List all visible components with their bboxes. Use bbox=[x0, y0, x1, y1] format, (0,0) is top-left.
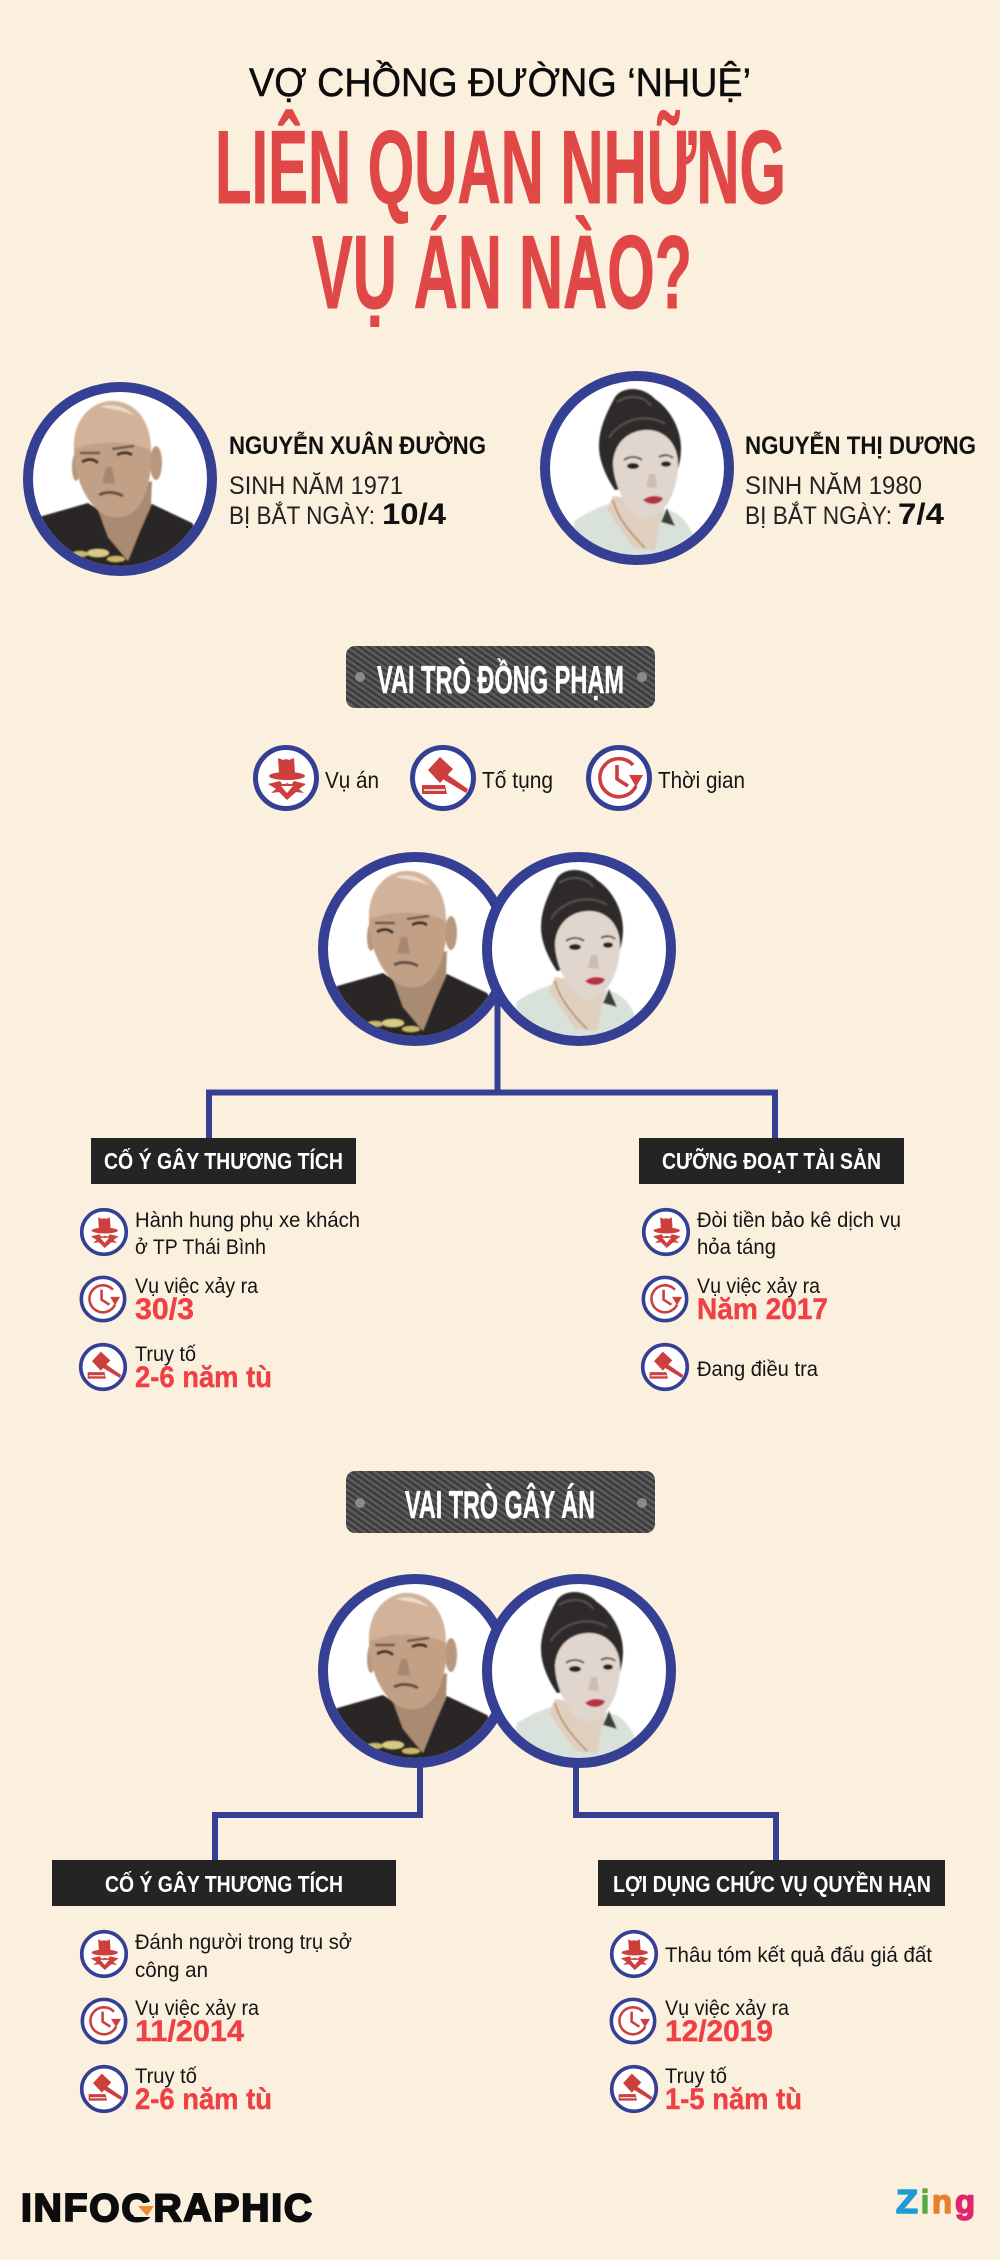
time value: 30/3 bbox=[135, 1293, 194, 1326]
icon: gavel bbox=[81, 1345, 125, 1389]
arrest date: 10/4 bbox=[382, 498, 446, 531]
portrait: woman bbox=[545, 376, 729, 563]
title bbox=[215, 59, 786, 331]
time label: Vụ việc xảy ra bbox=[135, 1997, 259, 2020]
profile: Nguyễn Xuân Đường bbox=[25, 387, 486, 574]
case description: Đòi tiền bảo kê dịch vụ bbox=[697, 1209, 901, 1232]
case heading: Cố ý gây thương tích: CỐ Ý GÂY THƯƠNG TÍCH bbox=[105, 1870, 343, 1897]
icon: gavel bbox=[612, 2067, 656, 2111]
legend bbox=[256, 748, 745, 808]
case description: Hành hung phụ xe khách bbox=[135, 1209, 360, 1232]
case description line 2: hỏa táng bbox=[697, 1236, 776, 1259]
case heading: Lợi dụng chức vụ quyền hạn bbox=[598, 1860, 945, 1906]
case details: right column bbox=[611, 1932, 932, 2116]
case description: Thâu tóm kết quả đấu giá đất bbox=[665, 1944, 932, 1967]
case details: left column bbox=[82, 1931, 352, 2116]
footer logo: Infographic: INFOGRAPHIC bbox=[21, 2187, 312, 2230]
arrest label: BỊ BẮT NGÀY: bbox=[229, 500, 375, 530]
case heading: Cố ý gây thương tích bbox=[91, 1138, 356, 1184]
arrest date: 7/4 bbox=[898, 498, 944, 531]
time label: Vụ việc xảy ra bbox=[697, 1275, 820, 1298]
icon: spy bbox=[644, 1210, 688, 1254]
sentence value: 2-6 năm tù bbox=[135, 2083, 272, 2116]
sentence value: 2-6 năm tù bbox=[135, 1361, 272, 1394]
case heading: Cưỡng đoạt tài sản: CƯỠNG ĐOẠT TÀI SẢN bbox=[662, 1146, 881, 1174]
icon: gavel bbox=[412, 748, 474, 808]
connector: section 1 bbox=[209, 990, 775, 1138]
icon: spy bbox=[82, 1932, 126, 1976]
portrait: man bbox=[25, 387, 215, 574]
section banner: Vai trò đồng phạm bbox=[346, 646, 655, 708]
legend label: Tố tụng bbox=[482, 767, 553, 793]
icon: spy bbox=[82, 1210, 126, 1254]
section banner: Vai trò gây án bbox=[346, 1471, 655, 1533]
connector: section 2 left bbox=[215, 1760, 420, 1860]
birth year: SINH NĂM 1971 bbox=[229, 471, 403, 500]
icon: gavel bbox=[643, 1345, 687, 1389]
prosecution label: Truy tố bbox=[135, 1343, 196, 1366]
case heading: Lợi dụng chức vụ quyền hạn: LỢI DỤNG CHỨC VỤ QUYỀN HẠN bbox=[613, 1870, 931, 1897]
icon: clock bbox=[588, 748, 650, 808]
sentence value: 1-5 năm tù bbox=[665, 2083, 802, 2116]
case description line 2: ở TP Thái Bình bbox=[135, 1236, 266, 1259]
icon: spy bbox=[612, 1932, 656, 1976]
couple portraits: section 1 bbox=[320, 857, 671, 1044]
status: Đang điều tra bbox=[697, 1358, 818, 1381]
time value: 11/2014 bbox=[135, 2015, 244, 2048]
connector: section 2 right bbox=[576, 1760, 776, 1860]
footer logo: Zing: n bbox=[932, 2183, 952, 2220]
footer logo: Zing: i bbox=[921, 2183, 929, 2220]
legend label: Vụ án bbox=[325, 767, 379, 793]
case details: right column bbox=[643, 1209, 901, 1389]
footer logo: Zing bbox=[896, 2183, 975, 2220]
case heading: Cố ý gây thương tích: CỐ Ý GÂY THƯƠNG TÍCH bbox=[104, 1147, 343, 1174]
time value: Năm 2017 bbox=[697, 1293, 828, 1326]
icon: spy bbox=[256, 748, 316, 808]
icon: clock bbox=[611, 1999, 655, 2043]
case details: left column bbox=[81, 1209, 360, 1394]
name: NGUYỄN THỊ DƯƠNG bbox=[745, 430, 976, 460]
section banner: Vai trò gây án: VAI TRÒ GÂY ÁN bbox=[405, 1483, 595, 1527]
name: NGUYỄN XUÂN ĐƯỜNG bbox=[229, 430, 486, 460]
time label: Vụ việc xảy ra bbox=[665, 1997, 789, 2020]
time label: Vụ việc xảy ra bbox=[135, 1275, 258, 1298]
title line 3: VỤ ÁN NÀO? bbox=[312, 215, 692, 331]
prosecution label: Truy tố bbox=[135, 2065, 197, 2088]
icon: clock bbox=[643, 1277, 687, 1321]
time value: 12/2019 bbox=[665, 2015, 773, 2048]
title line 1: VỢ CHỒNG ĐƯỜNG ‘NHUỆ’ bbox=[249, 59, 751, 105]
couple portraits: section 2 bbox=[320, 1579, 671, 1766]
case description line 2: công an bbox=[135, 1959, 208, 1982]
section banner: Vai trò đồng phạm: VAI TRÒ ĐỒNG PHẠM bbox=[377, 658, 624, 702]
profile: Nguyễn Thị Dương bbox=[545, 376, 976, 563]
footer logo: Zing: Z bbox=[896, 2183, 918, 2220]
birth year: SINH NĂM 1980 bbox=[745, 471, 922, 500]
prosecution label: Truy tố bbox=[665, 2065, 727, 2088]
icon: clock bbox=[82, 1999, 126, 2043]
arrest label: BỊ BẮT NGÀY: bbox=[745, 500, 892, 530]
icon: gavel bbox=[82, 2067, 126, 2111]
legend label: Thời gian bbox=[658, 767, 745, 793]
case heading: Cưỡng đoạt tài sản bbox=[639, 1138, 904, 1184]
icon: clock bbox=[81, 1277, 125, 1321]
case description: Đánh người trong trụ sở bbox=[135, 1931, 352, 1954]
case heading: Cố ý gây thương tích bbox=[52, 1860, 396, 1906]
footer logo: Zing: g bbox=[955, 2183, 975, 2220]
